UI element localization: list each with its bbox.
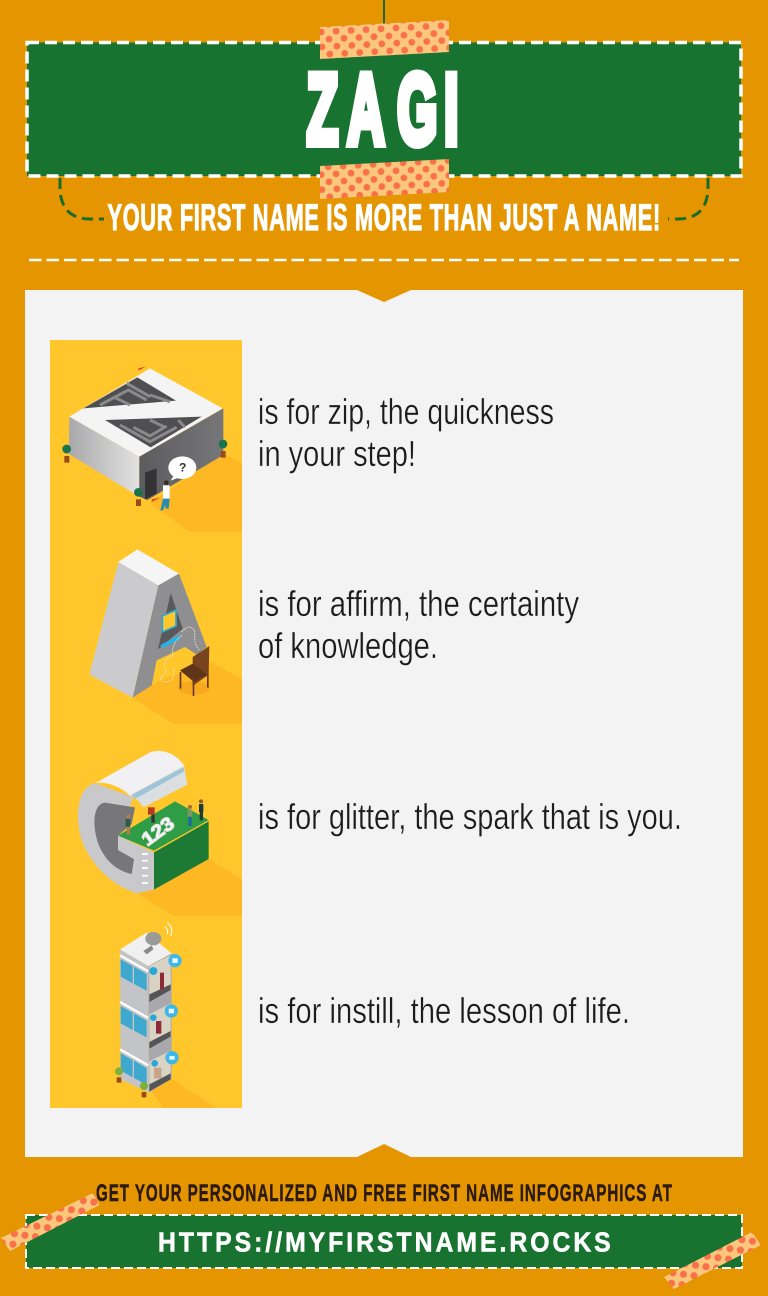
hanging thread [383, 0, 385, 24]
bracket: left dashed curve [60, 178, 104, 219]
illustration: letter I building [115, 923, 217, 1108]
text: A line [258, 583, 579, 666]
text: A line: is for affirm, the certainty [258, 583, 579, 624]
footer prompt: GET YOUR PERSONALIZED AND FREE FIRST NAME INFOGRAPHICS AT [96, 1181, 672, 1207]
123 blocks: 123 [137, 812, 178, 850]
icon: plant front [134, 488, 143, 506]
illustration: letter G garden [78, 751, 242, 916]
speech bubble: ? [179, 461, 186, 475]
icon: plant left [62, 445, 71, 463]
windows [121, 959, 147, 1085]
text: A line: of knowledge. [258, 625, 438, 666]
tape: bottom right [664, 1232, 761, 1289]
satellite dish [143, 923, 172, 954]
icon: plant right [219, 440, 227, 458]
dashed divider [29, 259, 739, 261]
text: Z line: in your step! [258, 433, 416, 474]
illustration strip [50, 340, 242, 1108]
person [160, 480, 170, 511]
text: Z line: is for zip, the quickness [258, 391, 554, 432]
footer banner [26, 1215, 742, 1268]
plants [115, 1067, 148, 1097]
chair [180, 646, 209, 696]
footer url: HTTPS://MYFIRSTNAME.ROCKS [158, 1226, 611, 1258]
icon: cloud bubbles [165, 954, 182, 1064]
tape: bottom [320, 159, 449, 199]
illustration: letter A desk [89, 549, 242, 724]
tape: top [320, 20, 449, 59]
text: Z line [258, 391, 554, 474]
panel: content card [25, 290, 743, 1157]
bracket: right dashed curve [668, 178, 708, 219]
header banner [27, 20, 741, 199]
tagline: YOUR FIRST NAME IS MORE THAN JUST A NAME! [108, 197, 660, 239]
balconies [149, 955, 171, 1090]
illustration: letter Z maze [62, 367, 242, 532]
title: ZAGI [307, 54, 458, 165]
people [126, 799, 203, 835]
tape: bottom left [1, 1193, 100, 1251]
text: I line: is for instill, the lesson of life. [258, 990, 630, 1031]
speech bubble [168, 456, 196, 481]
